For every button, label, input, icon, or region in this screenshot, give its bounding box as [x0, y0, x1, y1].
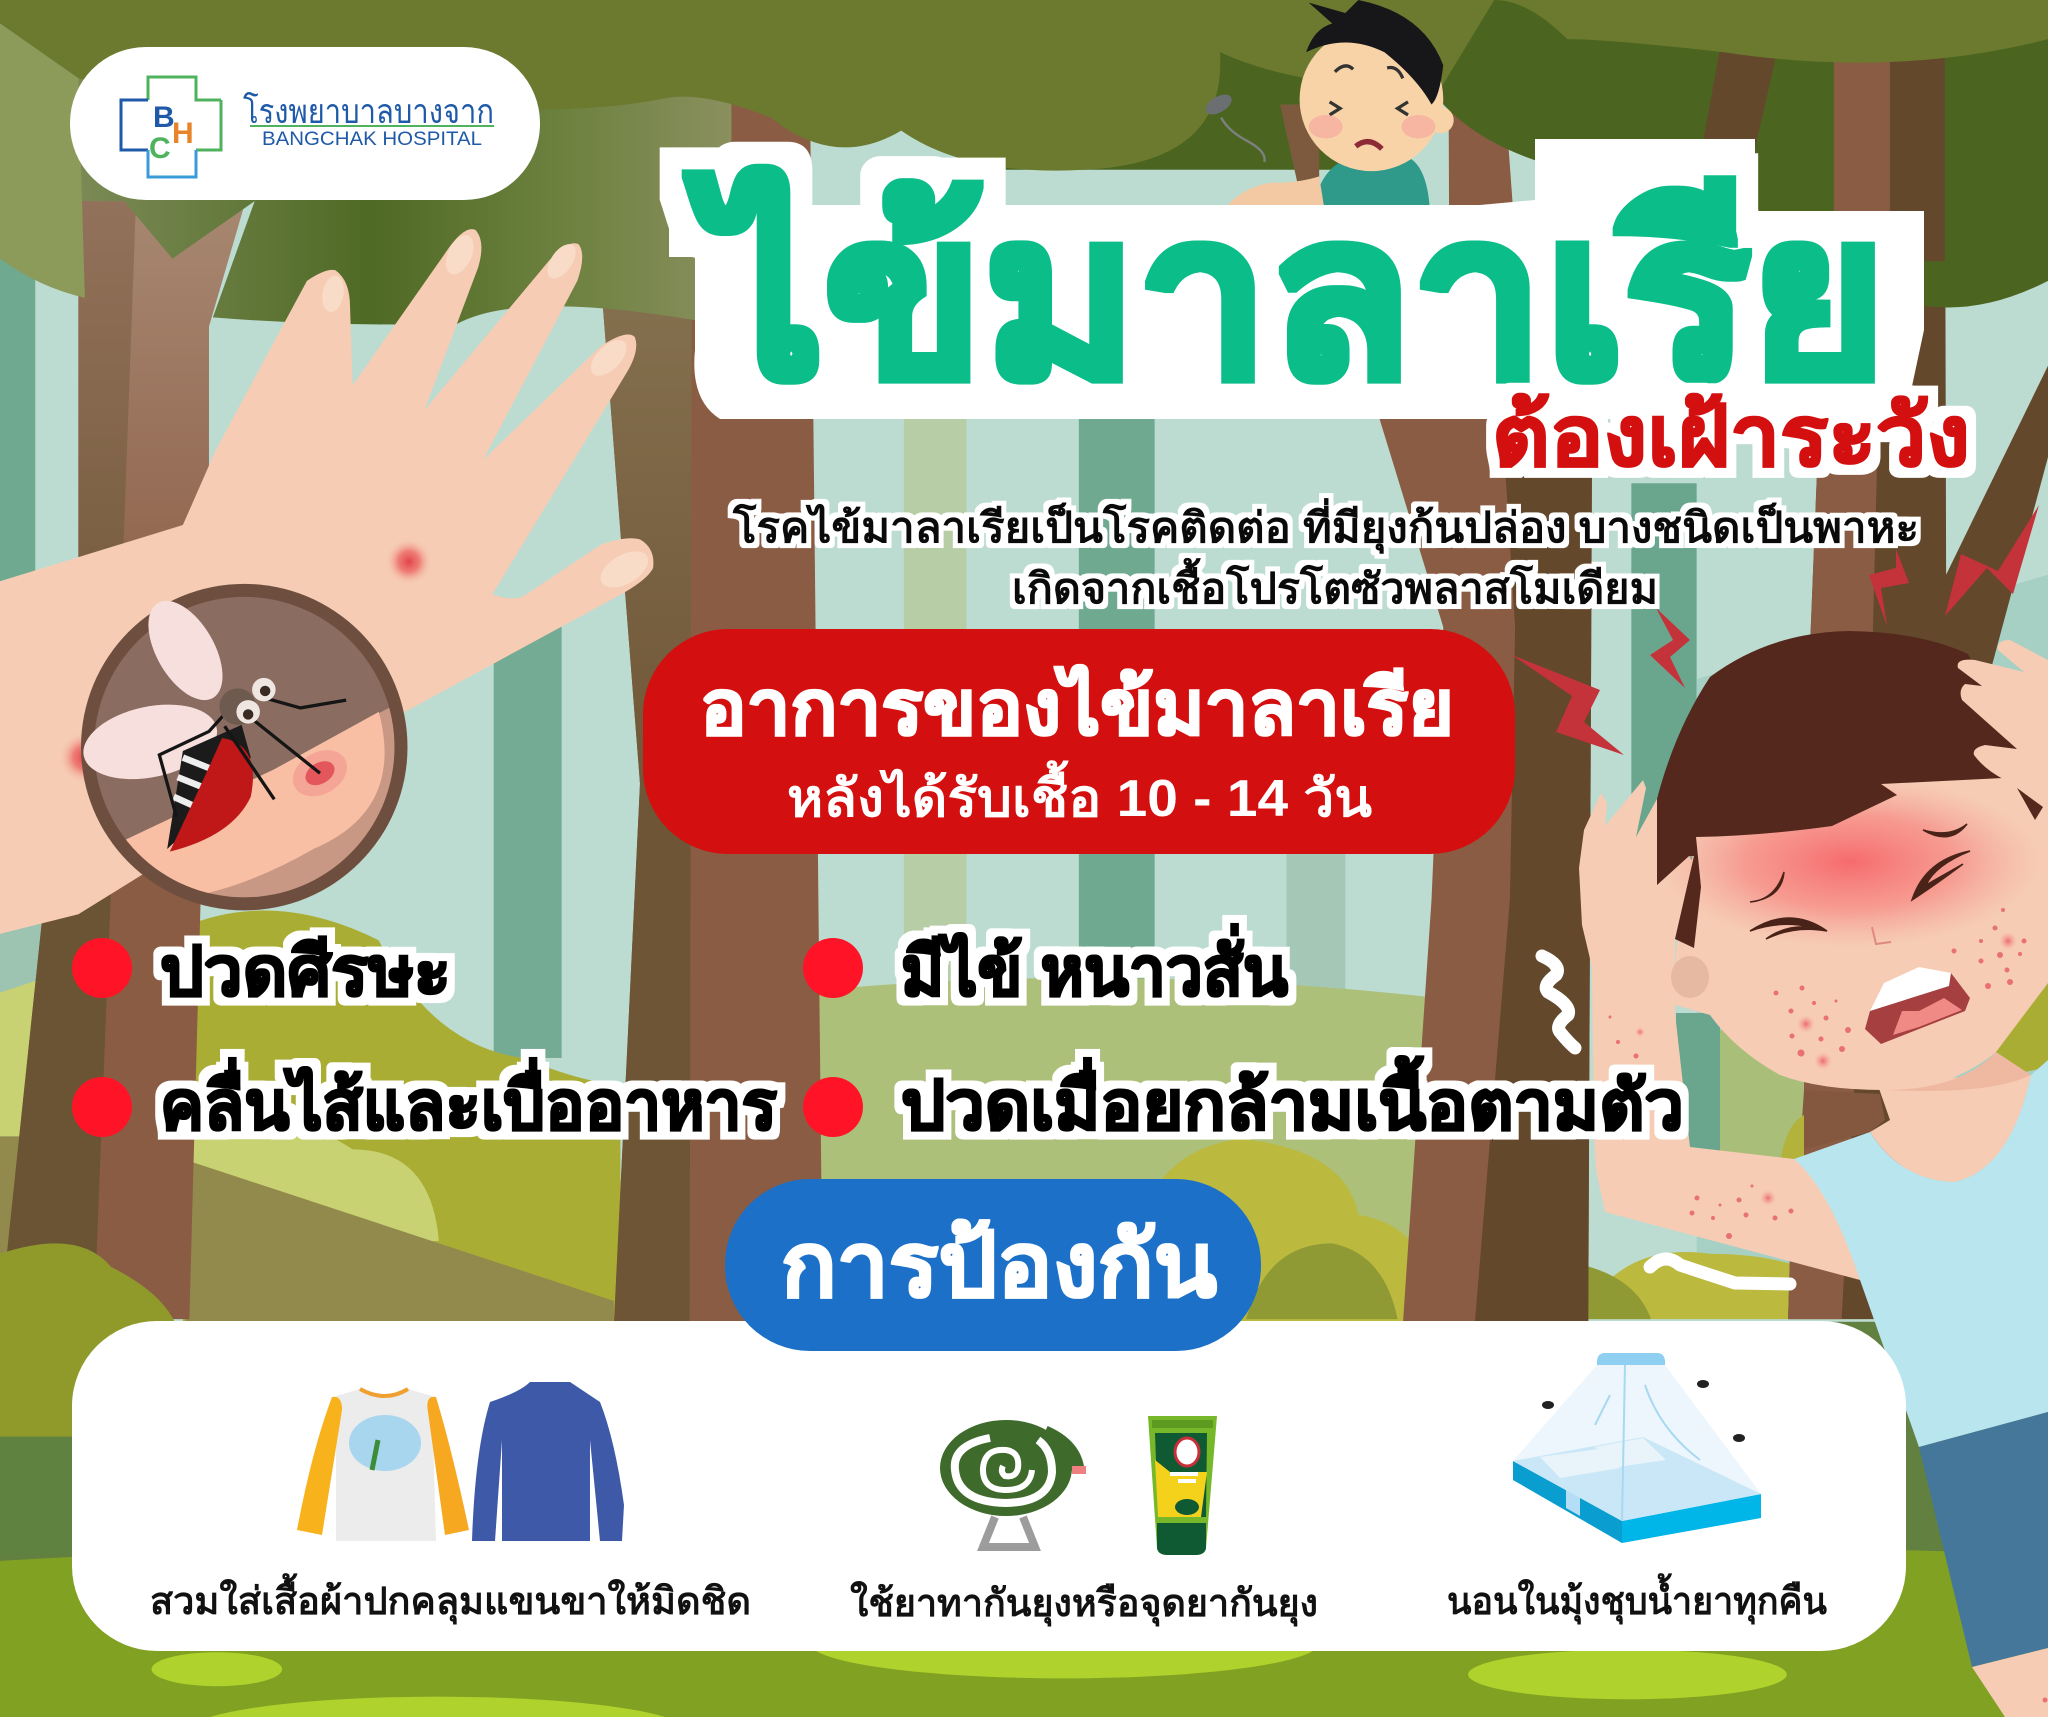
title: ไข้มาลาเรีย — [685, 167, 1887, 425]
symptom: nausea: คลื่นไส้และเบื่ออาหาร — [160, 1057, 777, 1144]
logo wordmark — [243, 92, 494, 150]
symptom: headache: ปวดศีรษะ — [160, 934, 451, 1010]
prevention panel: นอนในมุ้งชุบน้ำยาทุกคืน — [1447, 1573, 1827, 1625]
pain lightning bolts — [1512, 505, 2039, 755]
symptom: fever and chills — [803, 923, 1288, 1010]
prevention panel: ใช้ยาทากันยุงหรือจุดยากันยุง — [850, 1581, 1318, 1627]
illustration: boy with mosquito bite — [1202, 0, 1454, 219]
subtitle: ต้องเฝ้าระวัง — [1492, 389, 1970, 483]
icon: mosquito coil and repellent tube — [940, 1416, 1217, 1555]
illustration: sick boy with rash — [1512, 505, 2048, 1717]
logo mark — [121, 77, 221, 177]
pain squiggles — [1542, 956, 1790, 1284]
icon: mosquito net over bed — [1513, 1353, 1761, 1543]
magnifier circle with mosquito — [76, 584, 418, 914]
prevention heading: การป้องกัน — [781, 1216, 1217, 1316]
symptom: muscle ache: ปวดเมื่อยกล้ามเนื้อตามตัว — [901, 1055, 1684, 1144]
description — [732, 498, 1919, 612]
symptoms panel — [643, 629, 1515, 854]
symptom: fever and chills: มีไข้ หนาวสั่น — [901, 923, 1288, 1010]
prevention panel — [72, 1321, 1906, 1651]
symptoms panel: หลังได้รับเชื้อ 10 - 14 วัน — [787, 760, 1372, 828]
illustration: hand with bite — [0, 229, 654, 934]
icon: long sleeve shirts — [297, 1382, 624, 1541]
logo mark: H — [172, 117, 194, 150]
logo mark: B — [153, 101, 175, 134]
logo wordmark: โรงพยาบาลบางจาก — [243, 92, 494, 131]
logo wordmark: BANGCHAK HOSPITAL — [262, 129, 482, 150]
hospital logo pill — [70, 47, 540, 200]
prevention panel: สวมใส่เสื้อผ้าปกคลุมแขนขาให้มิดชิด — [150, 1573, 751, 1625]
description: เกิดจากเชื้อโปรโตซัวพลาสโมเดียม — [1012, 557, 1658, 612]
description: โรคไข้มาลาเรียเป็นโรคติดต่อ ที่มียุงก้นปล่อง บางชนิดเป็นพาหะ — [732, 498, 1919, 554]
logo mark: C — [149, 132, 171, 165]
prevention heading — [725, 1179, 1261, 1351]
symptoms panel: อาการของไข้มาลาเรีย — [700, 664, 1454, 751]
